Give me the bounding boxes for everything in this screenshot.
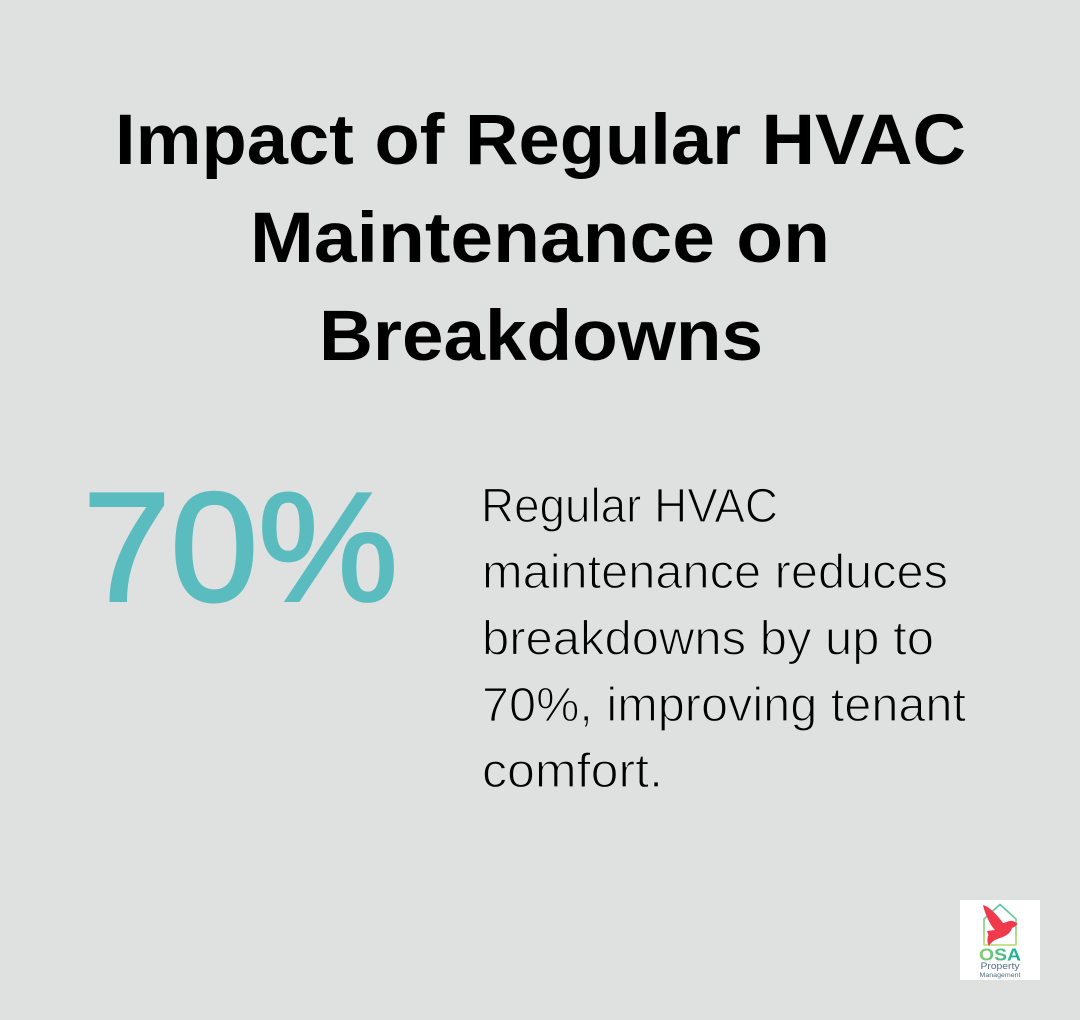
title: Impact of Regular HVAC bbox=[115, 101, 966, 180]
description text: comfort. bbox=[482, 745, 663, 798]
description text: maintenance reduces bbox=[482, 546, 948, 599]
title: Maintenance on bbox=[250, 199, 830, 278]
logo: OSA Property Management bbox=[960, 900, 1040, 980]
icon: red bird bbox=[983, 905, 1018, 946]
logo subtitle: Property bbox=[980, 961, 1020, 972]
description text: breakdowns by up to bbox=[482, 612, 934, 666]
logo wordmark: OSA bbox=[979, 944, 1021, 964]
description text: Regular HVAC bbox=[481, 480, 778, 533]
title: Breakdowns bbox=[319, 297, 763, 376]
description text: 70%, improving tenant bbox=[482, 679, 966, 732]
logo subtitle second line: Management bbox=[980, 972, 1021, 979]
statistic: 70%: 70% bbox=[83, 460, 398, 634]
description text bbox=[481, 480, 966, 798]
icon: house outline bbox=[984, 904, 1016, 945]
title bbox=[115, 101, 966, 376]
